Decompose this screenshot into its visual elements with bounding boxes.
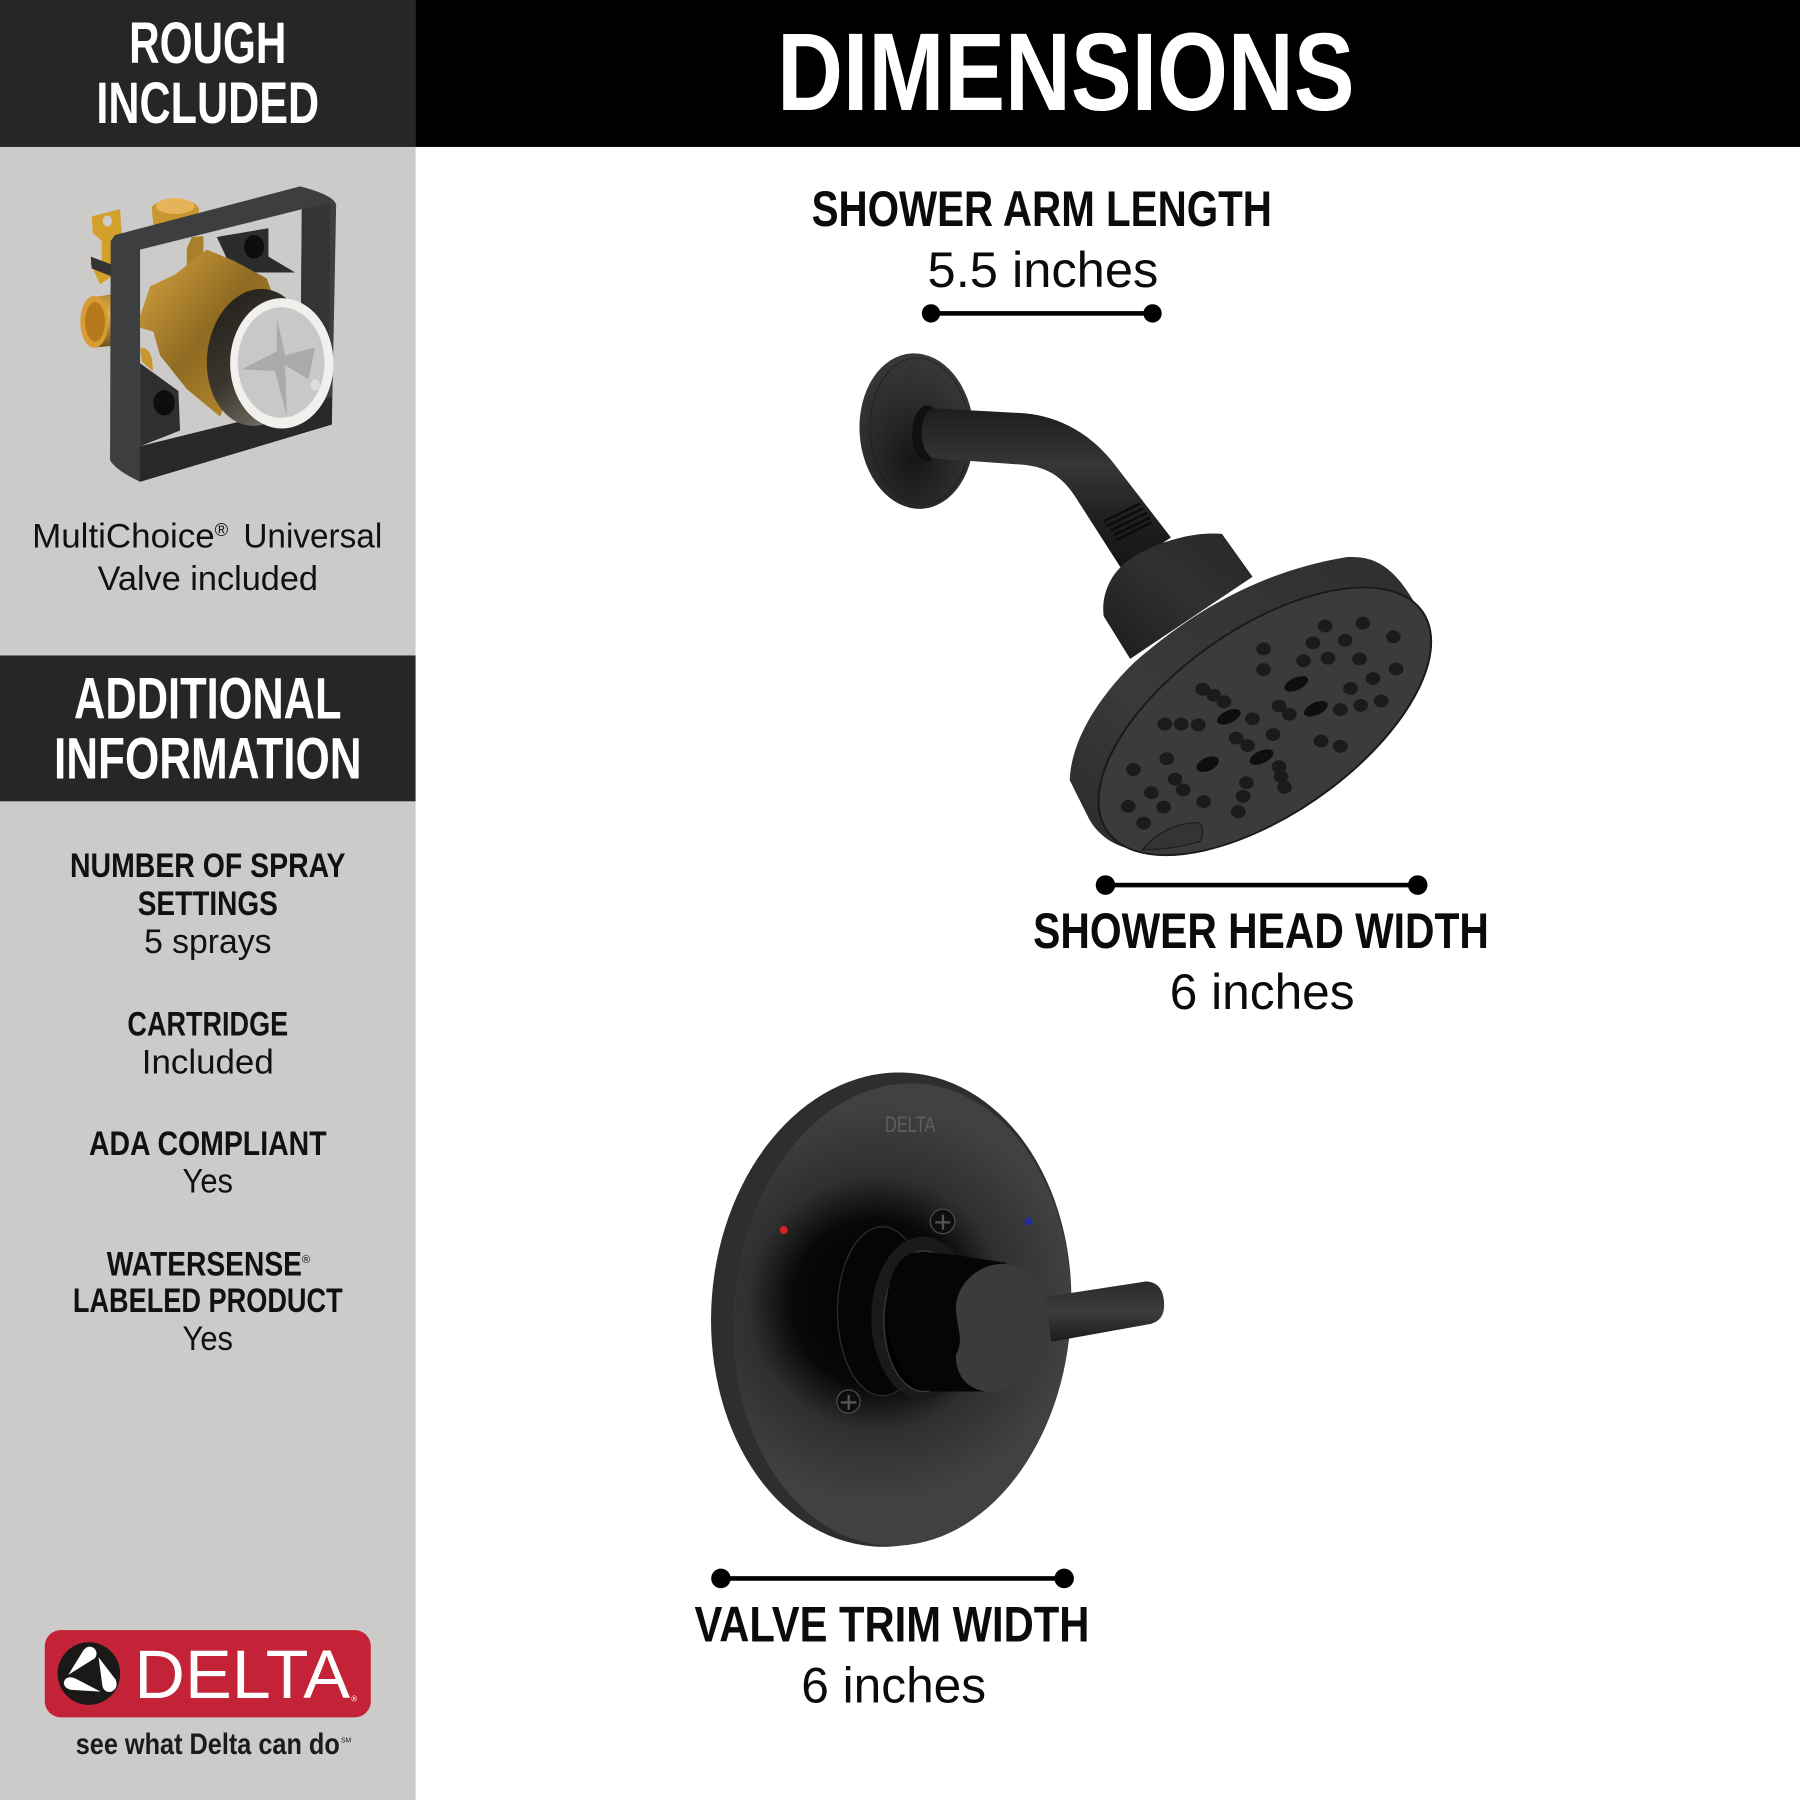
spec: number of spray settings: NUMBER OF SPRAY — [70, 847, 346, 885]
Delta logo: ® — [351, 1694, 357, 1703]
wall flange — [855, 351, 978, 511]
heading: additional information: ADDITIONAL — [74, 667, 342, 732]
chrome ring — [230, 298, 333, 428]
brass left pipe — [95, 294, 115, 348]
image: shower arm and head — [855, 351, 1484, 904]
spec: cartridge: CARTRIDGE — [127, 1005, 288, 1043]
valve caption: ® — [215, 519, 229, 540]
cold indicator — [1025, 1217, 1032, 1225]
measure line: head — [1096, 875, 1427, 895]
panel: left sidebar — [0, 0, 416, 1800]
dimension: shower arm length: 5.5 inches — [928, 241, 1158, 298]
plastic frame — [110, 186, 336, 482]
spray face — [1046, 539, 1484, 904]
valve caption — [32, 518, 382, 598]
heading: dimensions banner — [416, 0, 1800, 147]
brass top pipe — [152, 199, 199, 233]
shower head body — [1070, 557, 1427, 850]
logo tagline: see what Delta can do — [76, 1728, 340, 1761]
heading: dimensions banner: DIMENSIONS — [777, 11, 1355, 134]
spray selector tab — [1142, 822, 1203, 850]
rear mounting plate top — [217, 228, 295, 272]
dimension: valve trim width: VALVE TRIM WIDTH — [695, 1596, 1089, 1653]
spray jets — [1193, 673, 1331, 775]
dimension: shower head width: SHOWER HEAD WIDTH — [1033, 902, 1489, 959]
nozzles — [1128, 623, 1396, 823]
spec: WaterSense labeled product: LABELED PRODUCT — [73, 1282, 343, 1320]
screw top — [930, 1209, 955, 1234]
frame opening — [140, 209, 302, 446]
measure line: trim — [711, 1569, 1074, 1588]
spec: ADA compliant: Yes — [183, 1163, 233, 1201]
valve caption: Universal — [243, 518, 382, 556]
brass stub — [187, 236, 203, 269]
measure line: arm — [922, 304, 1162, 323]
handle hub — [887, 1252, 1007, 1392]
Delta logo: DELTA — [134, 1636, 350, 1713]
frame right inner wall — [300, 203, 330, 407]
spec: WaterSense labeled product — [73, 1245, 343, 1358]
dimension: shower arm length: SHOWER ARM LENGTH — [812, 180, 1272, 237]
heading: additional information: INFORMATION — [54, 726, 362, 791]
spec: WaterSense labeled product: ® — [302, 1254, 311, 1266]
frame bottom inner wall — [140, 397, 332, 482]
trim plate — [693, 1059, 1089, 1560]
frame screws — [244, 235, 264, 259]
lever handle — [956, 1264, 1164, 1392]
dimension: shower arm length — [812, 180, 1272, 323]
spec: ADA compliant — [89, 1125, 327, 1201]
brass valve body — [140, 250, 272, 417]
threads — [1104, 504, 1152, 540]
escutcheon collars — [837, 1227, 974, 1399]
Delta logo — [45, 1630, 371, 1717]
dimension: shower head width: 6 inches — [1170, 963, 1355, 1020]
spec: WaterSense labeled product: Yes — [183, 1320, 233, 1358]
icon: MultiChoice rough valve — [80, 186, 336, 482]
dimension: valve trim width — [695, 1569, 1089, 1713]
dimension: valve trim width: 6 inches — [801, 1656, 986, 1713]
spec: cartridge — [127, 1005, 288, 1081]
curved arm — [922, 408, 1171, 570]
image: valve trim and handle — [693, 1059, 1164, 1560]
spec: WaterSense labeled product: WATERSENSE — [107, 1245, 302, 1283]
heading: rough included — [0, 0, 416, 147]
heading: rough included: ROUGH — [129, 11, 286, 76]
heading: additional information — [0, 655, 416, 801]
valve caption: Valve included — [98, 560, 318, 598]
spec: cartridge: Included — [142, 1043, 274, 1081]
spec: number of spray settings: SETTINGS — [138, 885, 278, 923]
grey plug — [238, 307, 324, 418]
spec: number of spray settings — [70, 847, 346, 961]
heading: rough included: INCLUDED — [96, 71, 319, 136]
logo tagline: SM — [341, 1738, 352, 1745]
icon: Delta triangle mark — [58, 1642, 120, 1705]
rear mounting plate bottom — [140, 363, 180, 446]
spec: number of spray settings: 5 sprays — [144, 923, 271, 961]
screw bottom — [837, 1390, 860, 1413]
dark metal collar — [194, 275, 321, 439]
dimension: shower head width — [1033, 875, 1489, 1020]
plate engraving: DELTA — [885, 1112, 936, 1137]
spec: ADA compliant: ADA COMPLIANT — [89, 1125, 327, 1163]
valve caption: MultiChoice — [32, 518, 215, 556]
hot indicator — [780, 1226, 788, 1234]
brass mounting tab — [90, 209, 122, 284]
shower head neck — [1103, 533, 1253, 659]
